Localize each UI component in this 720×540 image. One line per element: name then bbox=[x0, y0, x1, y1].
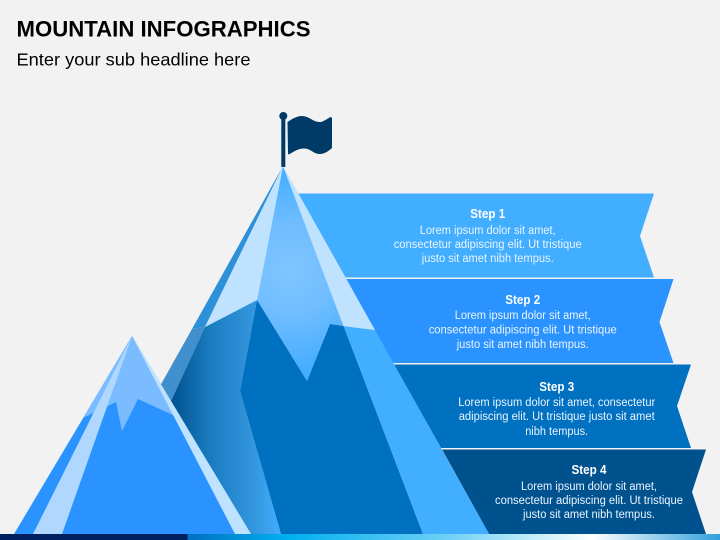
footer bar gradient segment bbox=[188, 534, 720, 540]
subtitle: Enter your sub headline here bbox=[16, 50, 250, 70]
centre light face bbox=[257, 166, 344, 381]
banner: step 1 bbox=[298, 194, 654, 278]
small mountain snow cap bbox=[83, 336, 177, 431]
banner: step 1: consectetur adipiscing elit. Ut tristique bbox=[394, 239, 582, 251]
right snow cap bbox=[283, 166, 375, 330]
banner: step 3 bbox=[394, 364, 691, 448]
small mountain bbox=[14, 336, 251, 534]
banner: step 1: justo sit amet nibh tempus. bbox=[421, 253, 554, 265]
banner: step 4: Lorem ipsum dolor sit amet, bbox=[521, 481, 657, 493]
large mountain bbox=[77, 166, 489, 534]
dark front face bbox=[240, 300, 423, 534]
lower left shaded edge bbox=[77, 327, 205, 534]
banner: step 2: consectetur adipiscing elit. Ut tristique bbox=[429, 324, 617, 336]
banner: step 2: justo sit amet nibh tempus. bbox=[456, 339, 589, 351]
banner: step 1: Lorem ipsum dolor sit amet, bbox=[420, 225, 556, 237]
banner: step 3: Step 3 bbox=[539, 380, 574, 394]
banner: step 1: Step 1 bbox=[470, 207, 505, 221]
banner: step 4: Step 4 bbox=[572, 463, 607, 477]
small mountain right light strip bbox=[132, 336, 251, 534]
banner: step 4: consectetur adipiscing elit. Ut tristique bbox=[495, 495, 683, 507]
banner: step 3: nibh tempus. bbox=[525, 426, 588, 438]
left snow cap bbox=[205, 166, 283, 327]
banner: step 2: Step 2 bbox=[505, 293, 540, 307]
small mountain left light strip bbox=[33, 336, 132, 534]
right bright face bbox=[344, 326, 489, 534]
banner: step 2: Lorem ipsum dolor sit amet, bbox=[455, 310, 591, 322]
upper left shaded edge bbox=[192, 166, 283, 329]
banner: step 4 bbox=[442, 450, 706, 534]
icon: flag on summit bbox=[279, 112, 332, 167]
footer bar dark segment bbox=[0, 534, 188, 540]
title: MOUNTAIN INFOGRAPHICS bbox=[16, 16, 310, 42]
banner: step 3: adipiscing elit. Ut tristique justo sit amet bbox=[459, 411, 655, 423]
banner: step 3: Lorem ipsum dolor sit amet, consectetur bbox=[458, 397, 655, 409]
left gradient face bbox=[100, 300, 281, 534]
banner: step 2 bbox=[346, 279, 674, 363]
banner: step 4: justo sit amet nibh tempus. bbox=[522, 509, 655, 521]
